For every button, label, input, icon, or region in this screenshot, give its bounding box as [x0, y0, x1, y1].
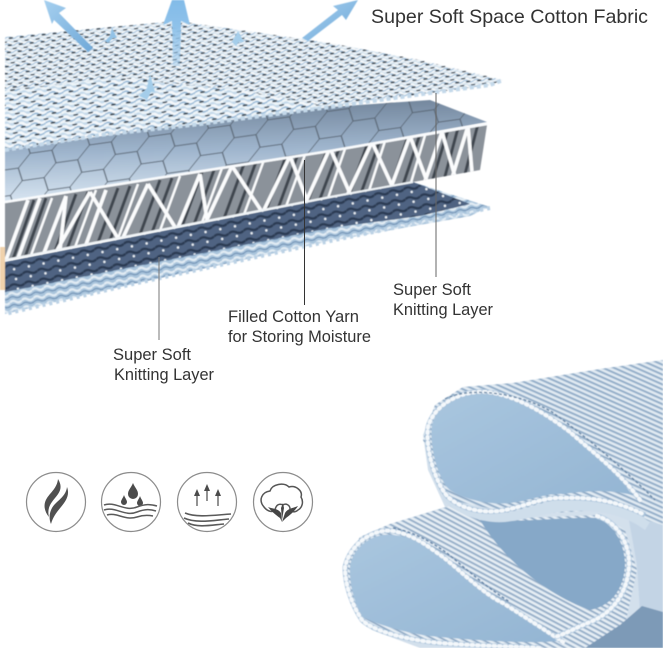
label: top knitting layer line 2: Knitting Layer: [393, 301, 494, 319]
upper hole: [431, 394, 632, 503]
filled cotton yarn zigzag layer: [0, 120, 495, 265]
moisture arrows: [44, 0, 358, 100]
frayed edge lower left: [345, 531, 563, 648]
arrow: center: [163, 0, 190, 66]
right side fold: [628, 515, 663, 615]
hexagon layer: [5, 100, 487, 201]
label: bottom knitting layer: Super Soft: [113, 346, 191, 364]
lower right hole: [480, 518, 625, 610]
leader line: bottom knitting layer: [158, 257, 160, 340]
top knitting layer: [5, 21, 503, 150]
bottom white edge: [5, 182, 413, 260]
lower loop ribbed fabric: [343, 506, 637, 648]
arrow: small left: [105, 28, 117, 43]
top knit scalloped edge: [5, 80, 503, 150]
lower left hole: [350, 535, 563, 642]
arrow: small right: [232, 31, 244, 46]
label: cotton yarn: Filled Cotton Yarn: [228, 308, 359, 326]
leader line: cotton yarn: [304, 160, 306, 305]
front band under upper hole: [443, 492, 650, 530]
left edge tan strip: [0, 247, 5, 290]
leader line: top knitting layer: [435, 93, 437, 277]
edge shadows: [445, 392, 655, 500]
label: bottom knitting layer line 2: Knitting Layer: [114, 366, 215, 384]
upper loop ribbed fabric: [423, 360, 663, 530]
title: Super Soft Space Cotton Fabric: [371, 7, 648, 28]
arrow: right: [302, 0, 358, 41]
bottom right dark band: [585, 606, 663, 648]
icon: heat waves: [26, 472, 86, 532]
arrow: small center: [139, 74, 155, 100]
frayed edge upper loop: [428, 392, 645, 515]
label: top knitting layer: Super Soft: [393, 281, 471, 299]
arrow: left: [44, 0, 93, 52]
rolled fabric: [343, 360, 663, 648]
layered fabric diagram: [0, 21, 503, 314]
icon: water drops on layers: [102, 472, 160, 532]
fabric base: [343, 360, 663, 648]
icon: upward arrows over layers: [178, 472, 236, 532]
top knitting layer front: [5, 78, 330, 150]
frayed edge fold: [555, 516, 629, 637]
icon: cotton boll: [254, 472, 312, 532]
bottom knitting layer: [5, 182, 490, 314]
label: cotton yarn line 2: for Storing Moisture: [228, 328, 371, 346]
top front white edge: [5, 124, 487, 202]
